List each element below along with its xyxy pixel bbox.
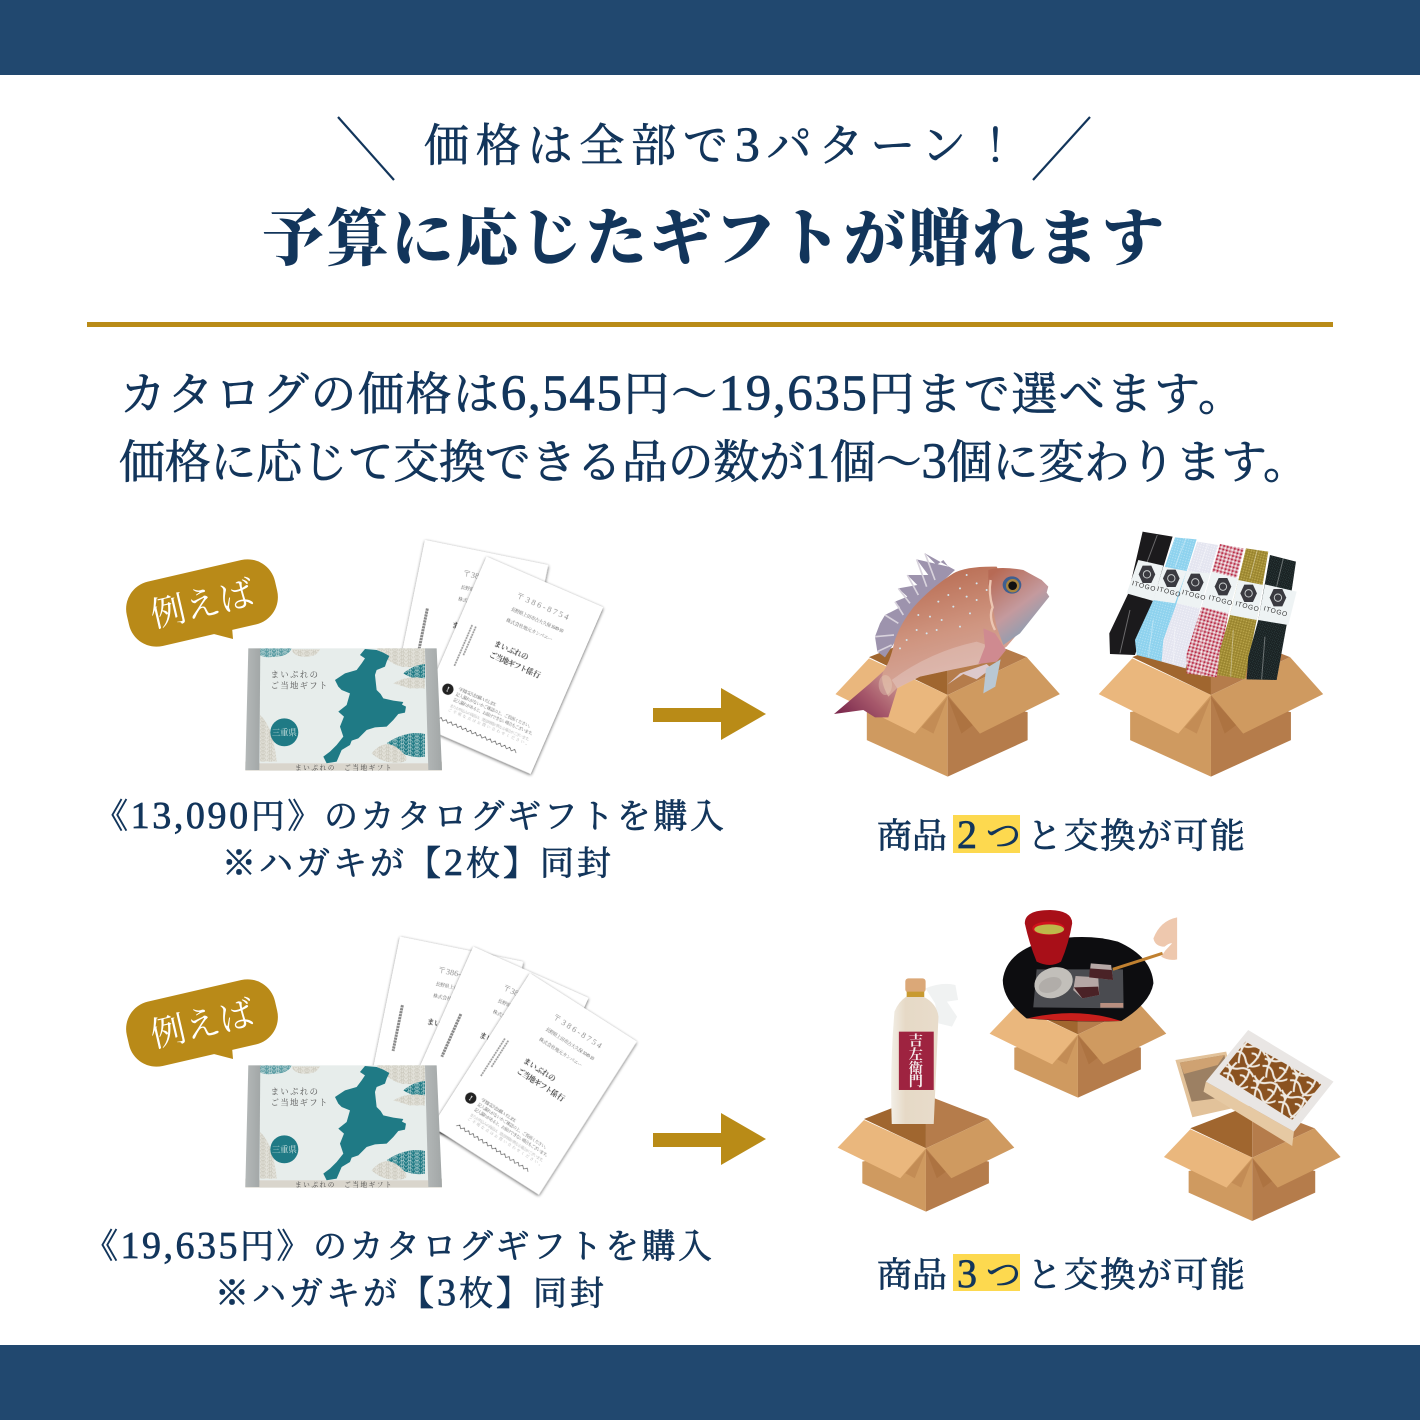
card front: 〒386-8754 bbox=[551, 1012, 604, 1051]
card front: ご当地ギフト係 行 bbox=[488, 650, 543, 680]
reply postcards bbox=[364, 937, 637, 1195]
box with bottle bbox=[838, 978, 1014, 1212]
cord olive bbox=[1217, 548, 1268, 679]
gill edge bbox=[990, 580, 995, 630]
top navy band bbox=[0, 0, 1420, 75]
card back: 株式会社地元カンパニー bbox=[458, 596, 509, 613]
pattern patches bbox=[260, 1065, 292, 1074]
cord label text: ITOGO bbox=[1263, 605, 1288, 619]
cord centre lines bbox=[1120, 535, 1283, 679]
cord logos bbox=[1139, 566, 1286, 606]
Mie badge bbox=[270, 718, 298, 746]
cord label text: ITOGO bbox=[1181, 589, 1207, 602]
card front: ご不明な点はお問い合わせください。 bbox=[447, 707, 530, 747]
cord red bbox=[1187, 544, 1244, 677]
caption line 1: 《19,635円》のカタログギフトを購入 bbox=[84, 1225, 712, 1267]
catalog box: 三重県 bbox=[272, 1144, 297, 1154]
card front: 長野県上田市古大久保 1049-10 bbox=[510, 605, 565, 635]
result text tail: と交換が可能 bbox=[1027, 1256, 1245, 1295]
card front: 記入漏れがないかご確認の上、ご投函ください。 bbox=[455, 690, 534, 729]
lower fins bbox=[947, 664, 992, 685]
belly bbox=[892, 642, 997, 688]
box title: まいぷれの bbox=[271, 671, 318, 680]
box title: まいぷれの bbox=[271, 1088, 318, 1097]
cord label text: ITOGO bbox=[1234, 600, 1260, 614]
bubble: for example: 例えば bbox=[147, 994, 258, 1055]
catalog box bbox=[245, 1065, 442, 1189]
box with bottle: 左 bbox=[909, 1046, 923, 1063]
reply postcards bbox=[389, 540, 603, 774]
card front: ! bbox=[467, 1094, 474, 1103]
result label row 1 bbox=[877, 812, 1245, 857]
card front: 記入漏れがあると、お届けできない場合もございます。 bbox=[474, 1106, 551, 1159]
result label row 2 bbox=[877, 1251, 1245, 1296]
caption line 2: ※ハガキが【2枚】同封 bbox=[222, 842, 611, 884]
cord labels bbox=[1127, 560, 1297, 625]
bottle body bbox=[891, 997, 938, 1124]
box with fish bbox=[834, 553, 1060, 777]
card front: 株式会社地元カンパニー bbox=[505, 617, 554, 643]
box with bottle: 衛 bbox=[909, 1060, 923, 1077]
logo marks bbox=[1143, 571, 1282, 601]
bottle neck bbox=[905, 978, 926, 992]
card front: またお申込みの商品は、発送時期が異なる場合がございます。 bbox=[469, 1112, 546, 1164]
cord blue bbox=[1135, 537, 1197, 662]
lacquer tray bbox=[1003, 937, 1153, 1021]
box with wooden case bbox=[1164, 1030, 1341, 1221]
card front: 今月度に記入をお願いいたします。 bbox=[458, 685, 500, 708]
card front: 〒386-8754 bbox=[515, 591, 571, 622]
title: 予算に応じたギフトが贈れます bbox=[262, 205, 1164, 274]
box with sweets bbox=[990, 910, 1177, 1098]
cord label text: ITOGO bbox=[1208, 594, 1233, 608]
card front: ! bbox=[445, 685, 451, 694]
right slash bbox=[1033, 117, 1090, 180]
lid cutout pattern bbox=[1219, 1042, 1322, 1120]
card middle: 〒386-8754 bbox=[501, 983, 542, 1008]
bubble: for example: 例えば bbox=[147, 574, 258, 635]
cord white bbox=[1162, 542, 1218, 668]
case base bbox=[1175, 1052, 1240, 1117]
box with bottle: 吉 bbox=[909, 1033, 923, 1050]
card middle: まいぷれの bbox=[478, 1030, 515, 1053]
Mie map bbox=[323, 649, 406, 763]
pectoral fin bbox=[978, 628, 1006, 664]
card front: 記入漏れがあると、お届けできない場合もございます。 bbox=[453, 696, 536, 737]
intro text bbox=[119, 366, 1309, 490]
box subtitle: ご当地ギフト bbox=[271, 680, 327, 690]
card back: 株式会社地元カンパニー bbox=[433, 992, 484, 1009]
highlight bbox=[953, 1254, 1020, 1291]
box edge text: まいぷれの ご当地ギフト bbox=[295, 1180, 392, 1189]
case lid edge bbox=[1204, 1082, 1294, 1146]
card front: ご当地ギフト係 行 bbox=[515, 1066, 567, 1104]
box with cords bbox=[1099, 532, 1323, 777]
slate bbox=[1033, 969, 1124, 1008]
eye bbox=[1003, 576, 1021, 594]
case lid top bbox=[1206, 1030, 1334, 1132]
card back: 長野県上田市古大久保 bbox=[435, 980, 482, 997]
box with bottle: 門 bbox=[909, 1074, 923, 1090]
intro line 2: 価格に応じて交換できる品の数が1個〜3個に変わります。 bbox=[119, 434, 1309, 490]
card front: まいぷれの bbox=[493, 639, 530, 662]
tray red rim bbox=[1028, 1013, 1121, 1021]
highlighted count: 2 つ bbox=[957, 812, 1021, 857]
bubble: for example bbox=[121, 974, 283, 1072]
card back: 〒386-8754 bbox=[462, 569, 504, 586]
grey side bands bbox=[245, 1065, 260, 1187]
result text: 商品 bbox=[877, 817, 947, 856]
card front: 株式会社地元カンパニー bbox=[538, 1036, 584, 1069]
card back bbox=[364, 937, 523, 1141]
card front: ご不明な点はお問い合わせください。 bbox=[467, 1116, 544, 1168]
cord black bbox=[1109, 532, 1173, 655]
card front bbox=[414, 557, 603, 774]
grey side bands bbox=[245, 648, 260, 770]
cord label text: ITOGO bbox=[1156, 586, 1182, 599]
cord label text bbox=[1131, 580, 1288, 619]
caption left bbox=[94, 795, 724, 884]
card front: 今月度に記入をお願いいたします。 bbox=[480, 1096, 520, 1124]
arrow bbox=[653, 688, 766, 740]
bottle label bbox=[899, 1032, 934, 1090]
result text tail: と交換が可能 bbox=[1027, 817, 1245, 856]
card back bbox=[389, 540, 548, 744]
card front bbox=[432, 973, 637, 1195]
highlighted count: 3 つ bbox=[957, 1251, 1021, 1296]
dorsal fin bbox=[875, 553, 955, 657]
card middle: 株式会社地元カンパニー bbox=[492, 1008, 541, 1035]
Mie badge bbox=[270, 1135, 298, 1163]
sweets bbox=[1030, 962, 1077, 1003]
bottom navy band bbox=[0, 1345, 1420, 1420]
Mie map bbox=[323, 1066, 406, 1180]
catalog box bbox=[245, 648, 442, 772]
subtitle: 価格は全部で3パターン！ bbox=[424, 116, 1018, 172]
card front: 長野県上田市古大久保 1049-10 bbox=[544, 1026, 596, 1062]
cloth bbox=[926, 984, 958, 1027]
card middle bbox=[399, 947, 588, 1165]
tail base highlight bbox=[879, 675, 892, 695]
scale dots bbox=[899, 574, 988, 649]
highlight bbox=[953, 815, 1020, 853]
hand bbox=[1153, 917, 1177, 960]
box subtitle: ご当地ギフト bbox=[271, 1097, 327, 1107]
cord label text: ITOGO bbox=[1131, 580, 1157, 593]
card back: まいぷれの bbox=[426, 1017, 464, 1033]
caption line 2: ※ハガキが【3枚】同封 bbox=[215, 1272, 604, 1314]
gold divider bbox=[87, 322, 1333, 327]
card front: 記入漏れがないかご確認の上、ご投函ください。 bbox=[477, 1101, 550, 1151]
pattern patches bbox=[260, 648, 292, 657]
catalog box: 三重県 bbox=[272, 727, 297, 737]
caption line 1: 《13,090円》のカタログギフトを購入 bbox=[94, 795, 724, 837]
intro line 1: カタログの価格は6,545円〜19,635円まで選べます。 bbox=[120, 366, 1244, 422]
arrow bbox=[653, 1113, 766, 1165]
cord dark green bbox=[1247, 555, 1296, 680]
example row 1 bbox=[94, 532, 1323, 884]
tail bbox=[834, 667, 897, 717]
left slash bbox=[338, 117, 394, 180]
card middle: 長野県上田市古大久保 bbox=[496, 997, 542, 1023]
wooden pick bbox=[1113, 953, 1163, 969]
head bbox=[988, 568, 1049, 645]
box edge text: まいぷれの ご当地ギフト bbox=[295, 763, 392, 772]
result text: 商品 bbox=[877, 1256, 947, 1295]
card back: まいぷれの bbox=[451, 620, 489, 636]
card front: またお申込みの商品は、発送時期が異なる場合がございます。 bbox=[449, 703, 532, 742]
card back: 長野県上田市古大久保 bbox=[460, 584, 507, 600]
header block bbox=[262, 116, 1164, 274]
red cup bbox=[1025, 910, 1072, 965]
fish body bbox=[882, 567, 1027, 697]
card back: 〒386-8754 bbox=[437, 965, 479, 982]
card front: まいぷれの bbox=[522, 1056, 558, 1083]
bubble: for example bbox=[121, 554, 283, 652]
example row 2 bbox=[84, 910, 1341, 1314]
caption left bbox=[84, 1225, 712, 1314]
